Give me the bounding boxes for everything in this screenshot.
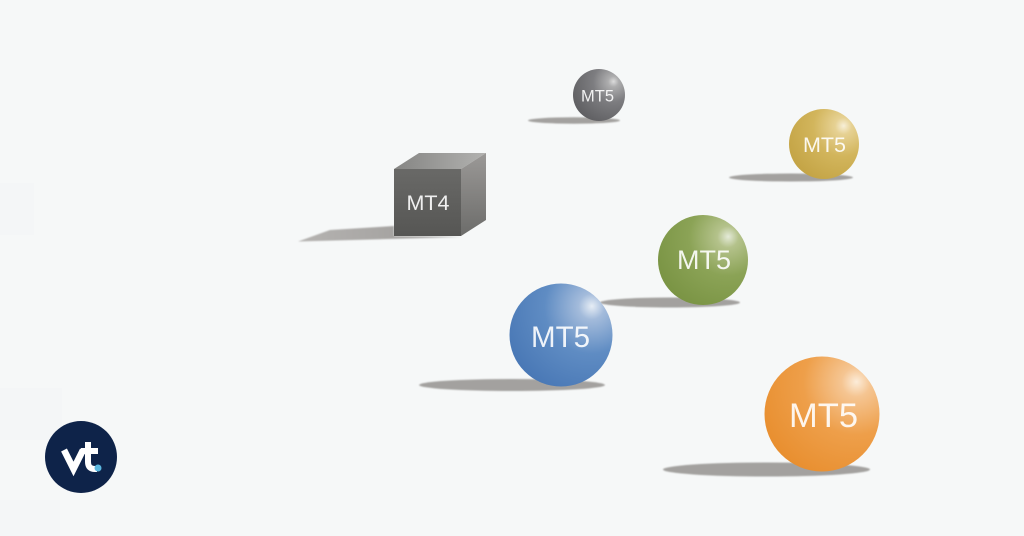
label: MT5 [581,88,614,106]
faint band: upper left [0,183,34,235]
logo: vt badge [45,421,117,493]
cube top face [394,153,486,169]
green MT5 sphere with shadow [600,215,748,308]
faint band: lower left [0,388,62,440]
cube label: MT4 [406,191,450,215]
sphere [658,215,748,305]
label: MT5 [803,133,846,157]
label: MT5 [677,245,731,275]
logo circle [45,421,117,493]
shadow [729,174,853,182]
sphere [764,356,880,472]
shadow [419,379,605,391]
faint band: bottom left [0,500,60,536]
letter t [81,442,98,469]
MT4 cube with shadow [298,153,486,242]
letter v [64,450,83,469]
label: MT5 [531,321,590,354]
sphere [573,69,625,121]
shadow [663,462,870,476]
shadow [600,298,740,308]
sphere [510,284,612,386]
yellow MT5 sphere with shadow [729,109,859,182]
grey MT5 sphere with shadow [528,69,625,124]
orange MT5 sphere with shadow [663,356,880,476]
cube shadow [298,226,461,242]
sphere [789,109,859,179]
label: MT5 [789,397,858,435]
logo dot [94,464,102,472]
shadow [528,117,620,124]
cube side face [461,153,486,236]
blue MT5 sphere with shadow [419,284,612,391]
cube front face [394,169,461,236]
